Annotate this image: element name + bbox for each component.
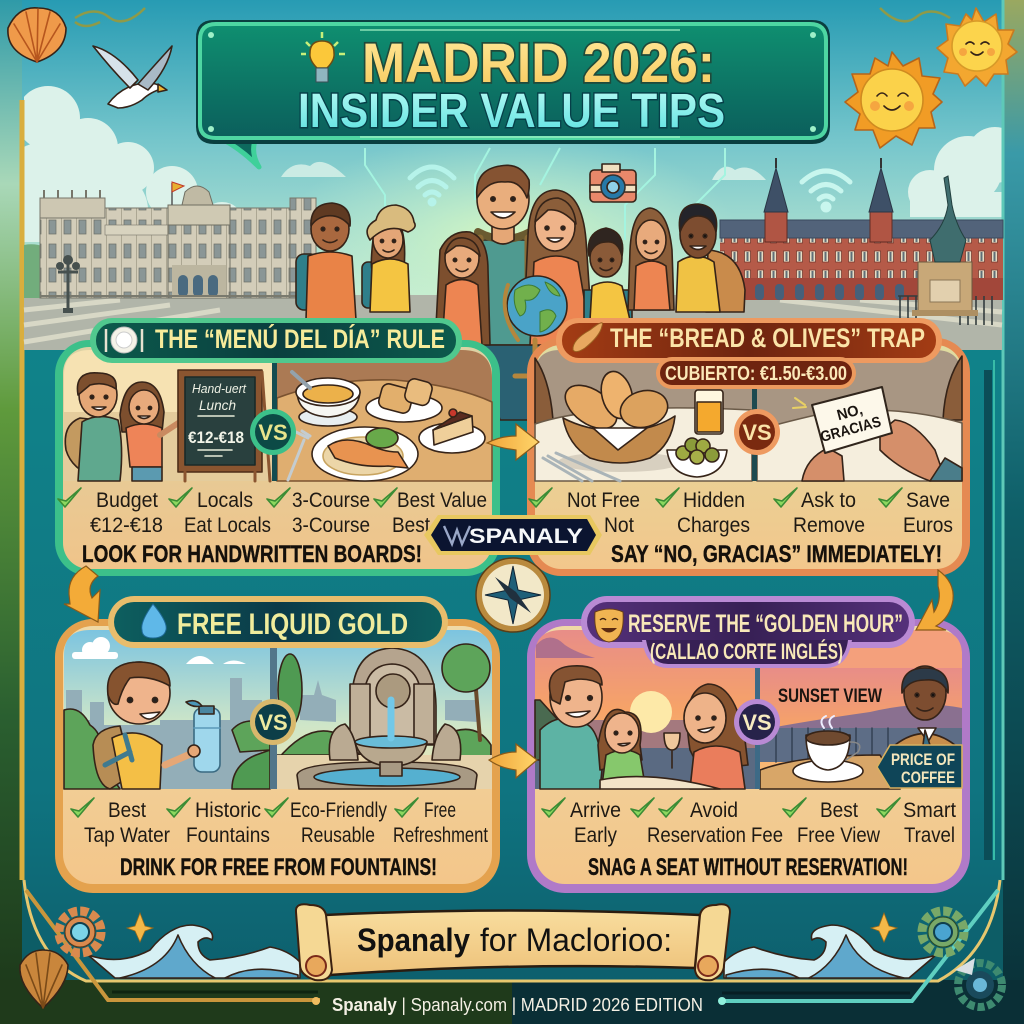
spanaly badge: SPANALY bbox=[469, 525, 583, 548]
icon: camera bbox=[590, 164, 636, 202]
scroll text: Spanaly bbox=[357, 922, 470, 958]
tip list: Best bbox=[392, 514, 430, 537]
callout text: SAY “NO, GRACIAS” IMMEDIATELY! bbox=[611, 541, 942, 568]
icon: wifi left bbox=[410, 167, 454, 204]
tip list bbox=[58, 488, 487, 537]
tip list: Charges bbox=[677, 514, 750, 537]
panel: free liquid gold bbox=[55, 596, 500, 893]
icon: plate and cutlery bbox=[106, 327, 142, 353]
vs badge: VS bbox=[258, 420, 288, 445]
heading pill bbox=[108, 596, 448, 648]
scroll banner bbox=[296, 904, 730, 980]
vs badge bbox=[250, 699, 296, 745]
title banner bbox=[196, 20, 830, 167]
icon: light bulb bbox=[301, 32, 345, 82]
person: man right with backpack bbox=[676, 204, 745, 312]
tip list: Ask to bbox=[801, 489, 856, 512]
tip list: Fountains bbox=[186, 824, 270, 847]
vs badge: VS bbox=[258, 710, 288, 735]
illustration: no gracias side bbox=[757, 350, 962, 481]
icon: baguette bbox=[573, 323, 602, 352]
tip list: Not bbox=[604, 514, 634, 537]
illustration: no gracias side: NO, bbox=[835, 401, 865, 424]
tip list: Remove bbox=[793, 514, 865, 537]
icon: gear left bbox=[59, 911, 101, 953]
panel: bread and olives bbox=[527, 318, 970, 576]
tip list: Reservation Fee bbox=[647, 824, 783, 847]
person: kid curly hair bbox=[584, 228, 632, 320]
icon: water drop bbox=[142, 604, 166, 638]
icon: sun large bbox=[845, 52, 942, 148]
title text: MADRID 2026: bbox=[362, 31, 715, 94]
callout text: DRINK FOR FREE FROM FOUNTAINS! bbox=[120, 854, 437, 881]
sunset view label: SUNSET VIEW bbox=[778, 686, 882, 707]
bread plate bbox=[366, 394, 442, 422]
location sub pill bbox=[642, 639, 852, 668]
arrow: liquid to reserve bbox=[489, 744, 537, 778]
icon: star right bbox=[871, 913, 897, 942]
tip list: Early bbox=[574, 824, 617, 847]
heading pill: THE “MENÚ DEL DÍA” RULE bbox=[155, 323, 445, 354]
vs badge bbox=[734, 699, 780, 745]
vs badge bbox=[734, 409, 780, 455]
plaza ground bbox=[24, 295, 1002, 350]
footer credit: Spanaly | Spanaly.com | MADRID 2026 EDITION bbox=[332, 995, 703, 1015]
tip list: Travel bbox=[904, 824, 955, 847]
cake plate bbox=[419, 423, 485, 453]
sky glow and circuit lines bbox=[280, 130, 740, 350]
illustration: no gracias side: GRACIAS bbox=[819, 413, 883, 446]
panel: golden hour bbox=[527, 596, 970, 893]
fork bbox=[288, 431, 310, 480]
arrow: bread to reserve bbox=[916, 570, 953, 630]
price of coffee tag: PRICE OF bbox=[891, 750, 955, 769]
tip list: Free View bbox=[797, 824, 881, 847]
tip list bbox=[529, 488, 953, 537]
heading pill bbox=[556, 318, 942, 363]
bottom waves left bbox=[88, 925, 300, 978]
icon: seagull bbox=[93, 46, 172, 108]
illustration: boy with bottle bbox=[64, 630, 270, 789]
tip list: Save bbox=[906, 489, 950, 512]
heading pill: FREE LIQUID GOLD bbox=[177, 608, 408, 641]
fountain monument bbox=[912, 176, 978, 316]
compass bbox=[476, 558, 550, 632]
tip list: Best bbox=[820, 799, 858, 822]
tip list: Free bbox=[424, 799, 456, 822]
icon: theatre mask bbox=[595, 609, 623, 642]
illustration: left scene: Lunch bbox=[199, 397, 236, 413]
spanaly badge bbox=[424, 515, 602, 555]
tip list: Tap Water bbox=[84, 824, 170, 847]
tip list: Hidden bbox=[683, 489, 745, 512]
illustration: coffee view bbox=[760, 630, 962, 789]
illustration: fountain bbox=[277, 630, 492, 789]
icon: gear corner bbox=[955, 958, 1002, 1007]
vs badge: VS bbox=[742, 710, 772, 735]
tip list: Avoid bbox=[690, 799, 738, 822]
icon: gear right bbox=[922, 911, 964, 953]
person: girl front bbox=[435, 232, 490, 345]
callout text: LOOK FOR HANDWRITTEN BOARDS! bbox=[82, 541, 422, 568]
tip list: Historic bbox=[195, 799, 261, 822]
price of coffee tag: COFFEE bbox=[901, 768, 955, 787]
tip list: Refreshment bbox=[393, 824, 488, 847]
fish plate bbox=[312, 427, 418, 481]
cubierto price pill bbox=[656, 357, 856, 389]
cubierto price pill: CUBIERTO: €1.50-€3.00 bbox=[665, 363, 847, 385]
vs badge: VS bbox=[742, 420, 772, 445]
tip list: Eat Locals bbox=[184, 514, 271, 537]
tip list: Smart bbox=[903, 799, 956, 822]
tip list: Budget bbox=[96, 489, 158, 512]
heading pill bbox=[90, 318, 462, 363]
tip list: Locals bbox=[197, 489, 253, 512]
tip list: Best bbox=[108, 799, 146, 822]
tip list: 3-Course bbox=[292, 489, 370, 512]
arrow: menu to liquid bbox=[64, 566, 100, 622]
icon: scallop shell top bbox=[8, 8, 66, 62]
heading pill: RESERVE THE “GOLDEN HOUR” bbox=[628, 610, 903, 638]
person: mom bbox=[525, 190, 592, 345]
person: girl with hat bbox=[362, 205, 415, 312]
person: girl right bbox=[628, 208, 674, 310]
bottom waves right bbox=[724, 925, 936, 978]
vs badge bbox=[250, 409, 296, 455]
location sub pill: (CALLAO CORTE INGLÉS) bbox=[650, 639, 843, 664]
plaza mayor bbox=[720, 158, 1003, 325]
illustration: family at sunset bbox=[535, 630, 755, 789]
panel: menu del dia bbox=[55, 318, 500, 576]
arrow: menu to bread bbox=[487, 424, 539, 460]
tip list: Eco-Friendly bbox=[290, 799, 387, 822]
icon: star left bbox=[127, 913, 153, 942]
icon: scallop shell bottom bbox=[20, 950, 68, 1008]
tip list: Not Free bbox=[567, 489, 640, 512]
heading pill bbox=[581, 596, 915, 648]
tip list bbox=[71, 798, 488, 847]
soup bowl bbox=[299, 408, 357, 426]
tip list: 3-Course bbox=[292, 514, 370, 537]
tip list bbox=[542, 798, 956, 847]
family group bbox=[296, 165, 745, 420]
icon: sun small bbox=[937, 8, 1017, 86]
subtitle text: INSIDER VALUE TIPS bbox=[298, 85, 725, 138]
illustration: left scene: €12-€18 bbox=[188, 428, 244, 447]
heading pill: THE “BREAD & OLIVES” TRAP bbox=[610, 323, 925, 353]
tip list: Reusable bbox=[301, 824, 375, 847]
icon: globe bbox=[505, 276, 567, 376]
tip list: €12-€18 bbox=[90, 514, 163, 537]
tip list: Best Value bbox=[397, 489, 487, 512]
illustration: bread side bbox=[535, 350, 752, 481]
price of coffee tag bbox=[891, 750, 955, 787]
tip list: Euros bbox=[903, 514, 953, 537]
clouds bbox=[0, 86, 1023, 248]
illustration: left scene bbox=[64, 350, 272, 481]
tip list: Arrive bbox=[570, 799, 621, 822]
person: boy left bbox=[296, 203, 356, 320]
illustration: left scene: Hand-uert bbox=[192, 381, 247, 396]
royal palace bbox=[24, 182, 316, 313]
person: dad bbox=[476, 165, 540, 420]
scroll text: for Maclorioo: bbox=[480, 922, 672, 958]
illustration: right scene bbox=[277, 350, 492, 481]
icon: wifi right bbox=[802, 171, 850, 210]
